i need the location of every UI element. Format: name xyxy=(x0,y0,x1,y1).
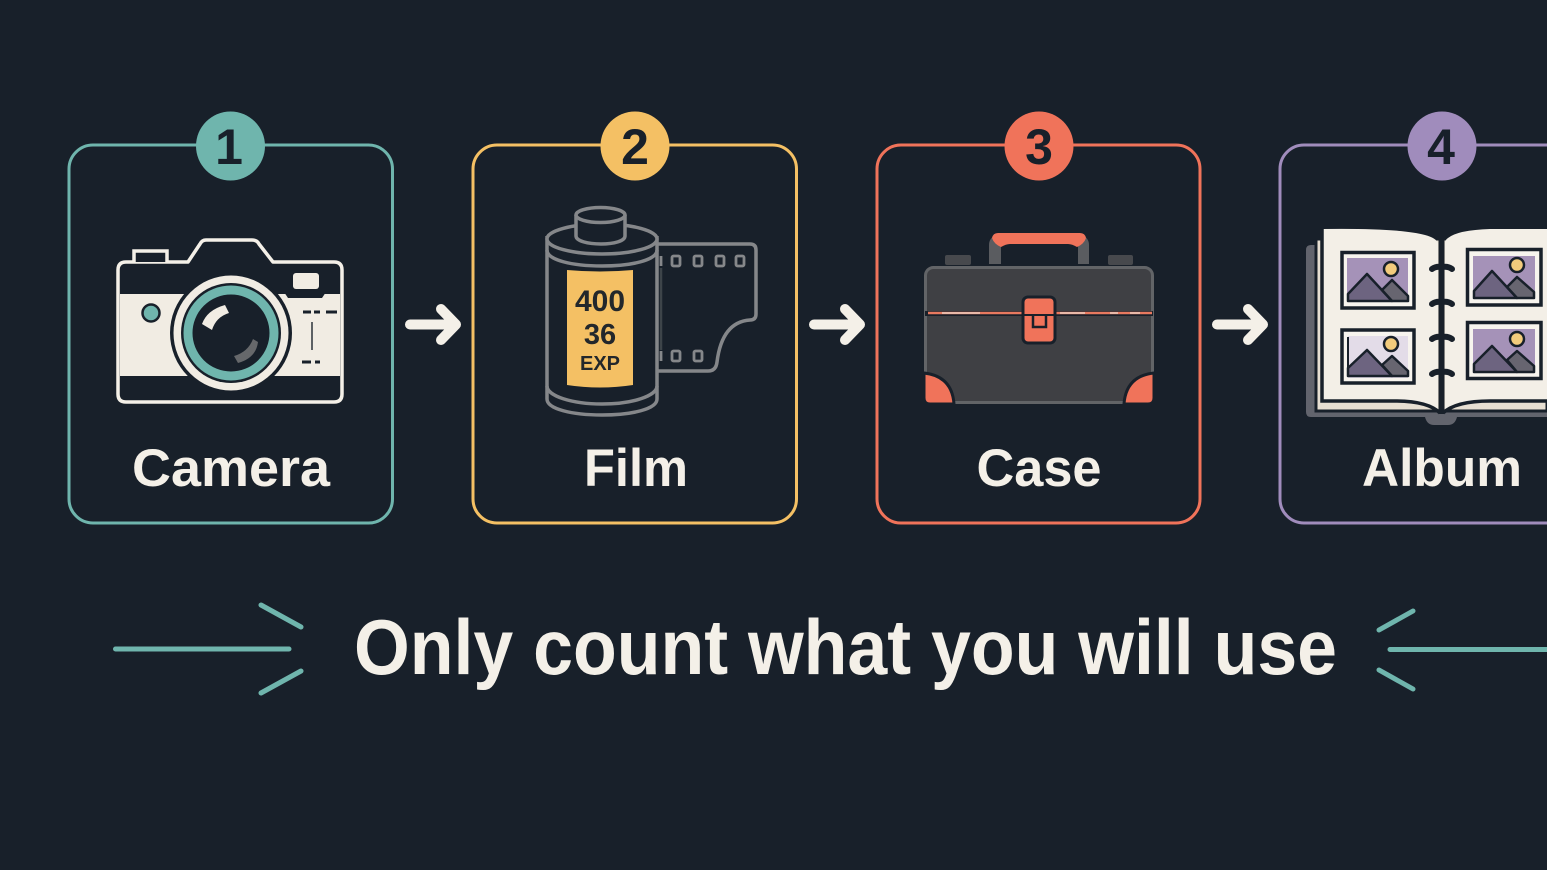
card outline: album xyxy=(1280,145,1547,523)
canister xyxy=(547,208,657,415)
photo: bottom right xyxy=(1468,322,1541,378)
panel: step 2 film xyxy=(473,112,796,523)
label text: EXP: EXP xyxy=(580,353,620,375)
label text: 400: 400 xyxy=(575,285,625,318)
label: Film: Film xyxy=(584,439,688,498)
photo: top right xyxy=(1468,250,1541,305)
card outline: camera xyxy=(69,145,392,523)
badge: number 4: 4 xyxy=(1427,119,1455,175)
badge: number 3 xyxy=(1004,112,1074,180)
icon: film roll xyxy=(547,208,756,415)
film label xyxy=(567,270,633,388)
label text: 36: 36 xyxy=(584,319,616,351)
badge: number 1 xyxy=(196,112,265,180)
panel: step 3 case xyxy=(877,112,1200,523)
binder rings xyxy=(1432,267,1452,374)
panel: step 4 album xyxy=(1280,112,1547,523)
card outline: case xyxy=(877,145,1200,523)
badge: number 4 xyxy=(1408,112,1476,180)
arrow: camera to film xyxy=(410,309,456,340)
photo: top left xyxy=(1342,252,1414,308)
badge: number 2 xyxy=(600,112,670,180)
badge: number 2: 2 xyxy=(621,119,649,175)
arrow: case to album xyxy=(1217,309,1263,340)
decorative pointer: right accent lines xyxy=(1379,611,1547,689)
arrow: film to case xyxy=(814,309,860,340)
label: Case: Case xyxy=(976,439,1102,498)
film strip xyxy=(657,244,756,371)
card outline: film xyxy=(473,145,796,523)
icon: photo album xyxy=(1306,229,1547,425)
badge: number 1: 1 xyxy=(215,119,243,175)
label: Camera: Camera xyxy=(132,439,331,498)
label: Album: Album xyxy=(1362,439,1522,498)
clasp xyxy=(1023,297,1055,343)
panel: step 1 camera xyxy=(69,112,392,523)
headline: Only count what you will use xyxy=(354,603,1337,691)
photo: bottom left xyxy=(1342,330,1414,383)
badge: number 3: 3 xyxy=(1025,119,1053,175)
decorative pointer: left accent lines xyxy=(116,605,301,693)
icon: camera xyxy=(118,240,342,402)
icon: case xyxy=(924,233,1154,404)
case corners xyxy=(924,373,1154,404)
